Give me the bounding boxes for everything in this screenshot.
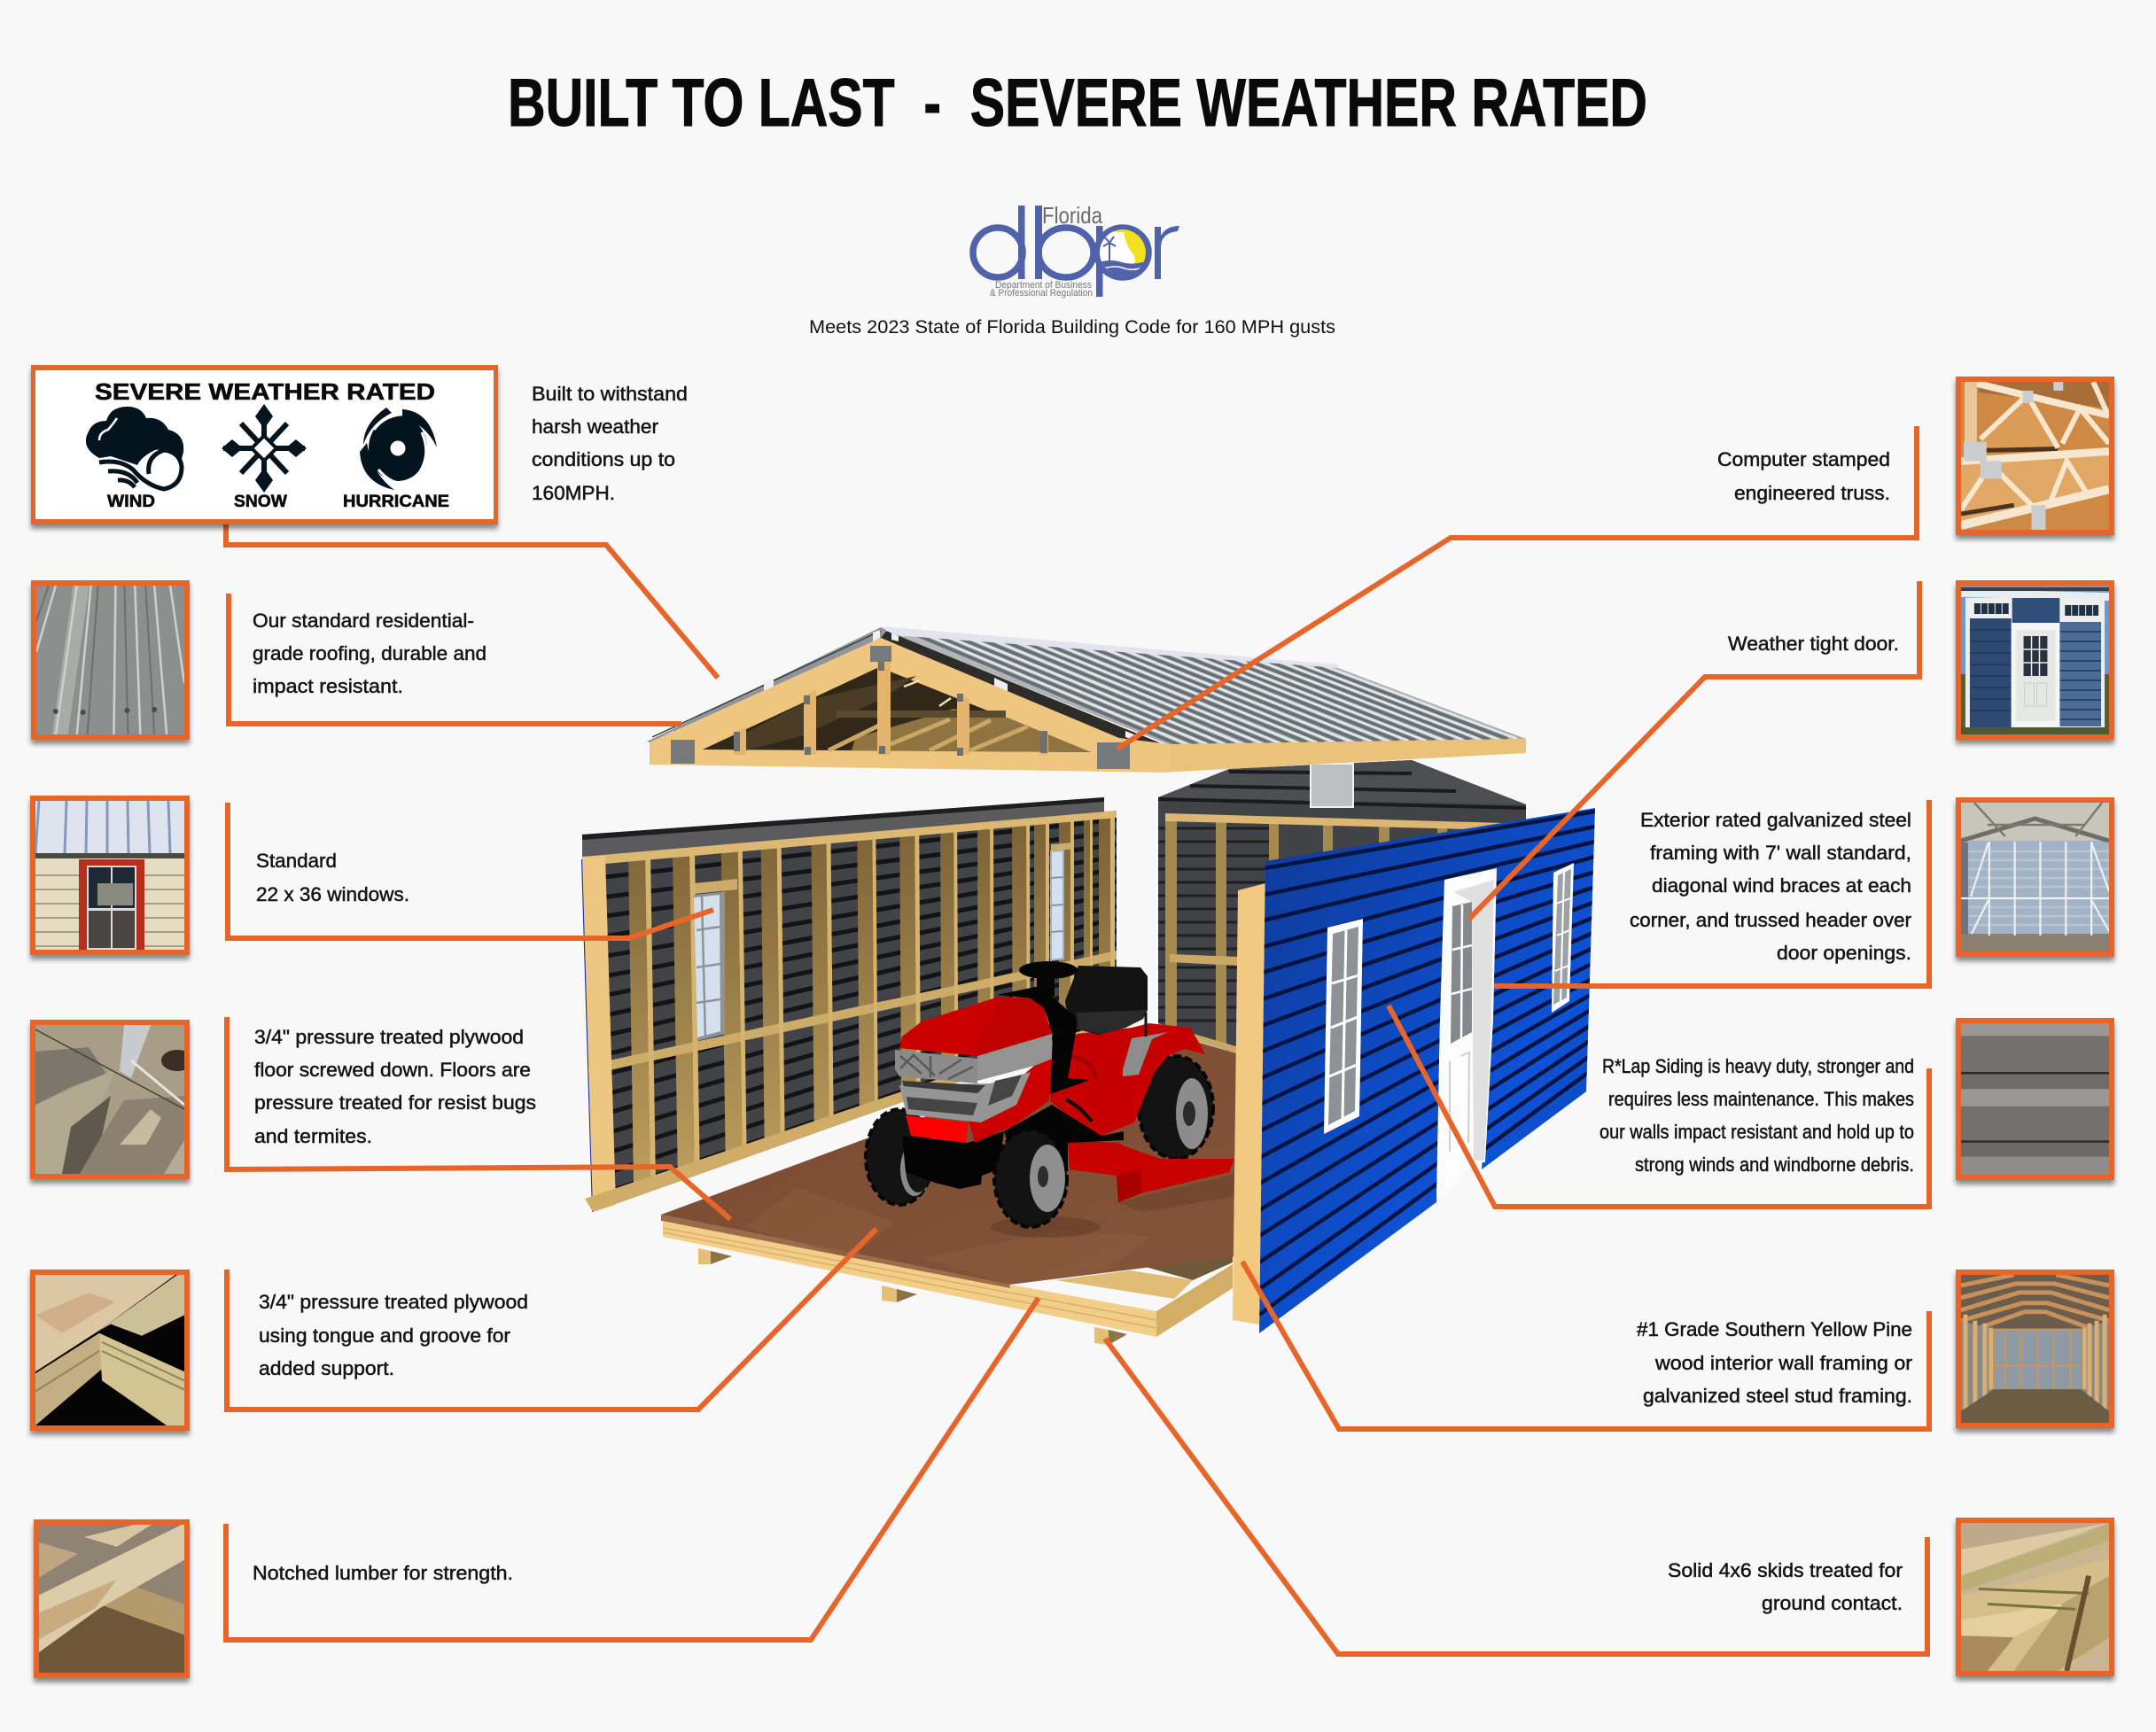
window in left wall [694,892,725,1041]
logo: Florida DBPR: Department of Business [995,280,1092,291]
badge: severe weather rated: WIND [107,493,155,511]
photo: window [30,796,190,955]
door [1436,868,1497,1198]
text: solid skids: ground contact. [1762,1592,1903,1614]
title: BUILT TO LAST - SEVERE WEATHER RATED [508,66,1647,141]
text: notched lumber: Notched lumber for strength. [253,1562,513,1584]
text: built to withstand: conditions up to [532,448,675,470]
photo: lap siding [1956,1018,2114,1180]
text: southern yellow pine: galvanized steel stud framing. [1643,1385,1912,1407]
text: steel framing: diagonal wind braces at each [1652,874,1911,897]
text: plywood floor: pressure treated for resist bugs [254,1091,536,1114]
photo: blue shed door [1956,580,2114,740]
text: solid skids: Solid 4x6 skids treated for [1668,1559,1903,1581]
icon: snow [222,404,307,493]
blocking rail [580,951,1117,1076]
stud side faces [628,812,1110,1198]
text: plywood floor: and termites. [254,1125,372,1147]
truss interior [703,662,1091,756]
siding window near [1324,919,1363,1134]
icon: hurricane [360,408,437,490]
metal roof panels [881,626,1526,745]
text: built to withstand: 160MPH. [532,482,615,504]
photo: tongue and groove [30,1270,190,1431]
text: windows: Standard [256,850,337,872]
badge: severe weather rated: SEVERE WEATHER RATED [95,378,435,405]
seat [1065,966,1148,1037]
text: roofing [253,610,486,697]
underside rear [1004,1105,1124,1178]
logo: Florida DBPR: Florida [1042,202,1102,229]
text: steel framing: framing with 7' wall standard, [1650,842,1911,864]
photo: notched lumber [34,1519,190,1678]
text: weather tight door: Weather tight door. [1728,633,1899,655]
roof assembly [647,626,1526,773]
stud front faces [645,811,1115,1192]
photo: wood interior framing [1956,1270,2114,1428]
photo: steel framing [1956,797,2114,957]
text: tongue and groove: added support. [259,1357,394,1379]
text: southern yellow pine: wood interior wall framing or [1654,1352,1913,1374]
badge: severe weather rated: HURRICANE [343,493,449,511]
red nose [906,1115,969,1143]
truss gusset plates [671,646,1130,769]
underside [902,1131,1004,1189]
text: steel framing [1630,809,1911,964]
lawn tractor [866,961,1234,1227]
mower deck [1068,1140,1234,1202]
text: windows: 22 x 36 windows. [256,883,409,905]
text: built to withstand: Built to withstand [532,383,688,405]
text: steel framing: door openings. [1777,942,1911,964]
side wall end stud [1233,883,1265,1324]
photo: treated lumber skids [1956,1518,2114,1676]
front right wheel [994,1130,1067,1227]
gable vent [1311,764,1353,807]
red side panel [969,1059,1052,1143]
text: steel framing: Exterior rated galvanized steel [1640,809,1911,831]
text: solid skids [1668,1559,1903,1614]
text: tongue and groove: using tongue and groove for [259,1324,511,1347]
blue siding wall [1259,808,1595,1333]
photo: plywood screwed down [30,1020,193,1179]
text: built to withstand: harsh weather [532,416,658,438]
rear wheel [1139,1056,1213,1159]
wall end plank [582,855,616,1212]
gray band [977,1034,1052,1081]
text: plywood floor: floor screwed down. Floors are [254,1059,531,1081]
text: roofing: grade roofing, durable and [253,642,486,664]
front left wheel [866,1109,933,1205]
text: plywood floor [254,1026,536,1147]
photo: metal roofing [31,580,190,740]
siding window far [1552,863,1574,1013]
hood [899,997,1052,1056]
text: R*Lap siding: strong winds and windborne debris. [1635,1153,1914,1176]
rear body [1050,1023,1205,1136]
badge: severe weather rated: SNOW [234,493,287,511]
text: plywood floor: 3/4" pressure treated plywood [254,1026,524,1048]
gable edge flashing [647,627,1170,747]
floor frame and skids [663,1222,1233,1345]
central illustration: exploded shed [580,626,1595,1345]
plywood floor [661,1030,1239,1288]
text: southern yellow pine [1637,1318,1913,1407]
text: computer stamped truss: Computer stamped [1717,448,1890,470]
text: tongue and groove [259,1291,528,1379]
lower grille [899,1072,1031,1122]
text: southern yellow pine: #1 Grade Southern Yellow Pine [1637,1318,1912,1340]
connector lines [226,426,1929,1654]
black pillar [997,986,1090,1094]
logo: Florida DBPR [973,202,1179,299]
text: R*Lap siding: R*Lap Siding is heavy duty, stronger and [1602,1055,1914,1077]
icon: wind [86,407,183,489]
back wall [1152,760,1526,1060]
far window in left wall [1051,850,1063,960]
text: computer stamped truss [1717,448,1890,504]
text: R*Lap siding [1599,1055,1914,1176]
text: R*Lap siding: requires less maintenance. This makes [1608,1088,1914,1110]
photo: engineered truss [1956,377,2114,535]
text: computer stamped truss: engineered truss. [1734,482,1890,504]
logo: Florida DBPR: & Professional Regulation [990,288,1093,299]
roof right fascia [1119,738,1526,773]
text: built to withstand [532,383,688,504]
text: steel framing: corner, and trussed header over [1630,909,1911,931]
badge: severe weather rated [31,365,498,524]
steering wheel [1019,961,1078,997]
text: roofing: impact resistant. [253,675,403,697]
text: R*Lap siding: our walls impact resistant and hold up to [1599,1121,1914,1143]
text: tongue and groove: 3/4" pressure treated plywood [259,1291,528,1313]
grille face [895,1050,977,1083]
text: windows [256,850,409,905]
text: roofing: Our standard residential- [253,610,474,632]
truss gable [650,638,1170,773]
subtitle: code compliance: Meets 2023 State of Florida Building Code for 160 MPH gusts [809,317,1335,338]
left wall framing [580,797,1117,1240]
